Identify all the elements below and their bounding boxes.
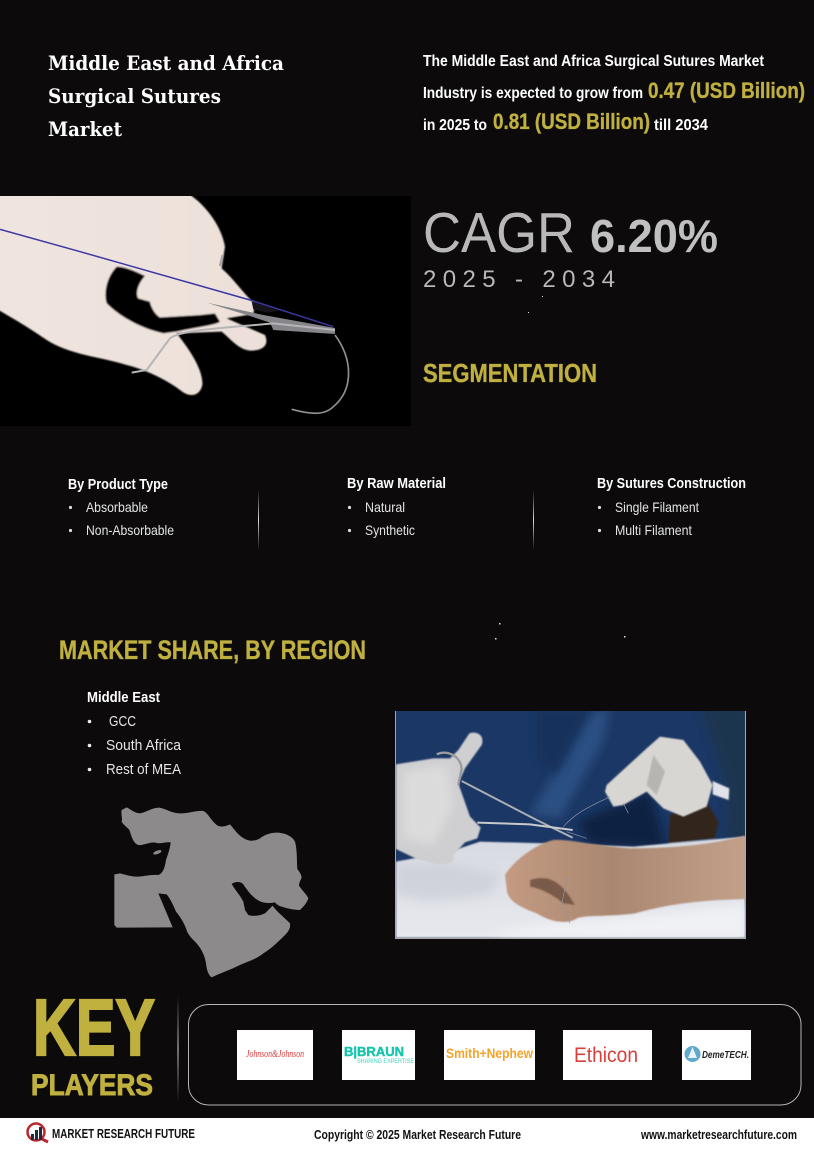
- CAGR figure: 2025 - 2034: [423, 266, 615, 293]
- footer bar: [0, 1118, 814, 1150]
- market growth statement: Industry is expected to grow from: [423, 85, 643, 102]
- heading: key players: KEY: [33, 983, 155, 1072]
- segment: by raw material: By Raw Material: [347, 476, 446, 492]
- footer bar: MARKET RESEARCH FUTURE: [52, 1127, 195, 1141]
- region list: [87, 690, 182, 778]
- segment: by product type: Absorbable: [86, 499, 148, 515]
- logo: B. Braun: SHARING EXPERTISE: [357, 1059, 414, 1065]
- photo: surgeon suturing a hand: [395, 705, 753, 939]
- region list: Rest of MEA: [106, 761, 181, 778]
- logo: DemeTECH: DemeTECH.: [702, 1050, 749, 1061]
- title: [48, 51, 284, 141]
- segment: by sutures construction: [597, 476, 746, 538]
- heading: key players: [31, 983, 155, 1102]
- specks: [495, 296, 626, 640]
- region list: GCC: [109, 713, 136, 730]
- title: Market: [48, 117, 123, 141]
- logo: B. Braun: [342, 1030, 415, 1080]
- key players panel: [188, 1004, 801, 1105]
- logo: Ethicon: Ethicon: [574, 1044, 638, 1067]
- photo: gloved hand holding suture needle: [0, 187, 411, 426]
- icon: market research future logo: [28, 1124, 48, 1142]
- logo: Smith+Nephew: Smith+Nephew: [446, 1046, 533, 1061]
- heading: key players: PLAYERS: [31, 1069, 153, 1102]
- market growth statement: 0.81 (USD Billion): [493, 109, 650, 134]
- logo: Johnson & Johnson: [237, 1030, 313, 1080]
- CAGR figure: CAGR: [423, 201, 575, 265]
- logo: Ethicon: [563, 1030, 652, 1080]
- segment: by product type: [68, 477, 174, 538]
- title: Middle East and Africa: [48, 51, 284, 75]
- map: Middle East and Africa region: [114, 807, 308, 977]
- segment: by sutures construction: Single Filament: [615, 499, 699, 515]
- region list: Middle East: [87, 690, 160, 706]
- CAGR figure: [423, 201, 718, 293]
- segment: by raw material: Natural: [365, 499, 405, 515]
- CAGR figure: 6.20%: [590, 210, 718, 262]
- segment: by product type: Non-Absorbable: [86, 522, 174, 538]
- market growth statement: till 2034: [654, 117, 708, 134]
- segment: by sutures construction: Multi Filament: [615, 522, 692, 538]
- logo: DemeTECH: [682, 1030, 751, 1080]
- logo: Johnson & Johnson: Johnson&Johnson: [246, 1048, 304, 1060]
- market growth statement: in 2025 to: [423, 117, 487, 134]
- region list: South Africa: [106, 737, 182, 754]
- segment: by raw material: [347, 476, 446, 538]
- logo: B. Braun: B|BRAUN: [344, 1044, 404, 1059]
- market growth statement: [423, 53, 805, 134]
- segment: by sutures construction: By Sutures Construction: [597, 476, 746, 492]
- footer bar: Copyright © 2025 Market Research Future: [314, 1128, 521, 1142]
- market growth statement: The Middle East and Africa Surgical Sutures Market: [423, 53, 764, 70]
- logo: Smith+Nephew: [444, 1030, 535, 1080]
- segment: by raw material: Synthetic: [365, 522, 415, 538]
- heading: segmentation: SEGMENTATION: [423, 358, 597, 388]
- heading: market share by region: MARKET SHARE, BY REGION: [59, 635, 366, 665]
- segment: by product type: By Product Type: [68, 477, 168, 493]
- title: Surgical Sutures: [48, 84, 221, 108]
